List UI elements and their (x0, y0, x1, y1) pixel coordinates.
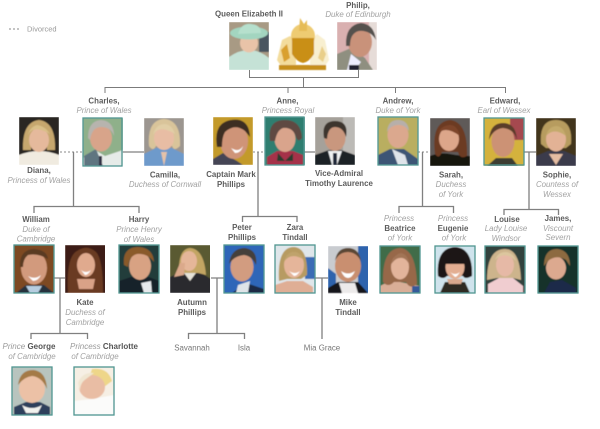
person: Vice-Admiral Timothy Laurence: Vice-Admiral (315, 169, 363, 178)
person: Andrew, Duke of York: Andrew, (383, 96, 413, 106)
person: Mike Tindall: Tindall (335, 308, 361, 317)
person: Edward, Earl of Wessex: Earl of Wessex (478, 106, 532, 115)
connector: Edward family (504, 152, 558, 215)
person: Harry, Prince Henry of Wales (116, 215, 163, 293)
person: William, Duke of Cambridge: Duke of (22, 225, 50, 234)
person: Kate, Duchess of Cambridge: Duchess of (65, 308, 106, 317)
person: Sophie, Countess of Wessex: Wessex (543, 190, 572, 199)
person: Autumn Phillips (170, 245, 211, 317)
person: Autumn Phillips: Autumn (177, 298, 207, 307)
person: Andrew, Duke of York: Duke of York (375, 106, 422, 115)
connector: Anne family (242, 152, 315, 222)
person: Princess Beatrice of York: Beatrice (384, 224, 416, 233)
person: Autumn Phillips: Phillips (178, 308, 207, 317)
person: Diana, Princess of Wales (7, 117, 71, 185)
grandchild label: Isla: Isla (238, 344, 251, 352)
person: Queen Elizabeth II (215, 10, 283, 70)
person: Charles, Prince of Wales (76, 96, 132, 166)
person: Queen Elizabeth II: Queen Elizabeth II (215, 10, 283, 18)
person: Prince George of Cambridge (3, 342, 56, 415)
person: Princess Beatrice of York (380, 214, 420, 293)
person: Diana, Princess of Wales: Princess of Wales (7, 176, 71, 185)
person: Vice-Admiral Timothy Laurence: Timothy Laurence (305, 179, 374, 188)
person: William, Duke of Cambridge (14, 215, 56, 293)
person: William, Duke of Cambridge: Cambridge (17, 234, 56, 244)
person: Sophie, Countess of Wessex (536, 118, 579, 199)
person: Harry, Prince Henry of Wales: Harry (129, 215, 150, 224)
grandchild label: Mia Grace: Mia Grace (304, 344, 341, 352)
person: Harry, Prince Henry of Wales: Prince Henry (116, 225, 163, 234)
connector: Zara family (315, 278, 328, 339)
person: James, Viscount Severn: Viscount (543, 224, 574, 233)
person: Princess Eugenie of York (435, 214, 475, 293)
person: Captain Mark Phillips: Phillips (217, 180, 246, 189)
person: Peter Phillips: Phillips (228, 233, 257, 242)
person: Sophie, Countess of Wessex: Countess of (536, 180, 579, 189)
person: William, Duke of Cambridge: William (22, 215, 50, 224)
person: Edward, Earl of Wessex: Edward, (490, 96, 520, 106)
person: Princess Beatrice of York: of York (388, 234, 413, 242)
person: Philip, Duke of Edinburgh: Philip, (346, 1, 370, 10)
person: Camilla, Duchess of Cornwall: Camilla, (150, 170, 180, 180)
person: Princess Eugenie of York: Princess (438, 214, 468, 223)
person: Sarah, Duchess of York (430, 118, 470, 199)
person: James, Viscount Severn: Severn (545, 233, 571, 242)
legend: divorced: Divorced (27, 24, 57, 34)
person: Captain Mark Phillips: Captain Mark (206, 170, 256, 179)
person: Charles, Prince of Wales: Charles, (88, 96, 120, 106)
person: James, Viscount Severn (538, 214, 578, 293)
person: Louise, Lady Louise Windsor: Lady Louise (485, 224, 528, 233)
legend: divorced (9, 24, 57, 34)
person: Camilla, Duchess of Cornwall (129, 118, 201, 189)
person: Anne, Princess Royal: Anne, (277, 96, 298, 106)
person: Princess Charlotte of Cambridge: Princess Charlotte (70, 342, 139, 351)
person: Louise, Lady Louise Windsor: Louise (494, 215, 520, 224)
connector: Queen and Philip to children (105, 70, 506, 93)
person: Anne, Princess Royal (262, 96, 315, 165)
connector: Peter family (188, 278, 244, 339)
person: Sarah, Duchess of York: Sarah, (439, 170, 463, 180)
person: Louise, Lady Louise Windsor (485, 215, 528, 293)
person: Princess Eugenie of York: of York (442, 234, 467, 242)
person: Peter Phillips (224, 223, 264, 293)
person: Mike Tindall (328, 246, 369, 317)
person: Prince George of Cambridge: of Cambridge (8, 352, 56, 361)
person: Vice-Admiral Timothy Laurence (305, 117, 374, 188)
person: Kate, Duchess of Cambridge: Cambridge (66, 318, 105, 327)
person: Princess Beatrice of York: Princess (384, 214, 414, 223)
person: Andrew, Duke of York (375, 96, 422, 165)
person: Zara Tindall: Tindall (282, 233, 308, 242)
person: Zara Tindall (275, 223, 315, 293)
person: Captain Mark Phillips (206, 117, 256, 189)
person: Edward, Earl of Wessex (478, 96, 532, 166)
crest: royal coat of arms (277, 18, 329, 70)
person: Diana, Princess of Wales: Diana, (27, 166, 51, 175)
person: Princess Charlotte of Cambridge: of Cambridge (71, 352, 119, 361)
person: Princess Charlotte of Cambridge (70, 342, 139, 415)
connector: William family (31, 278, 88, 339)
person: Philip, Duke of Edinburgh (325, 1, 391, 70)
person: Prince George of Cambridge: Prince George (3, 342, 56, 351)
person: Sophie, Countess of Wessex: Sophie, (543, 170, 571, 180)
person: Sarah, Duchess of York: of York (439, 190, 464, 199)
person: Kate, Duchess of Cambridge: Kate (76, 298, 94, 307)
person: James, Viscount Severn: James, (545, 214, 571, 223)
person: Peter Phillips: Peter (232, 223, 252, 232)
person: Charles, Prince of Wales: Prince of Wales (76, 106, 132, 115)
person: Anne, Princess Royal: Princess Royal (262, 106, 315, 115)
connector: Andrew family (399, 152, 454, 213)
person: Louise, Lady Louise Windsor: Windsor (492, 234, 521, 243)
connector: Charles family (34, 152, 144, 213)
person: Camilla, Duchess of Cornwall: Duchess of Cornwall (129, 180, 201, 189)
person: Zara Tindall: Zara (287, 223, 304, 232)
person: Sarah, Duchess of York: Duchess (436, 180, 466, 189)
person: Kate, Duchess of Cambridge (65, 245, 106, 327)
person: Harry, Prince Henry of Wales: of Wales (124, 235, 154, 244)
grandchild label: Savannah: Savannah (174, 344, 210, 352)
person: Mike Tindall: Mike (339, 298, 357, 307)
person: Philip, Duke of Edinburgh: Duke of Edinburgh (325, 10, 391, 19)
person: Princess Eugenie of York: Eugenie (438, 224, 469, 233)
